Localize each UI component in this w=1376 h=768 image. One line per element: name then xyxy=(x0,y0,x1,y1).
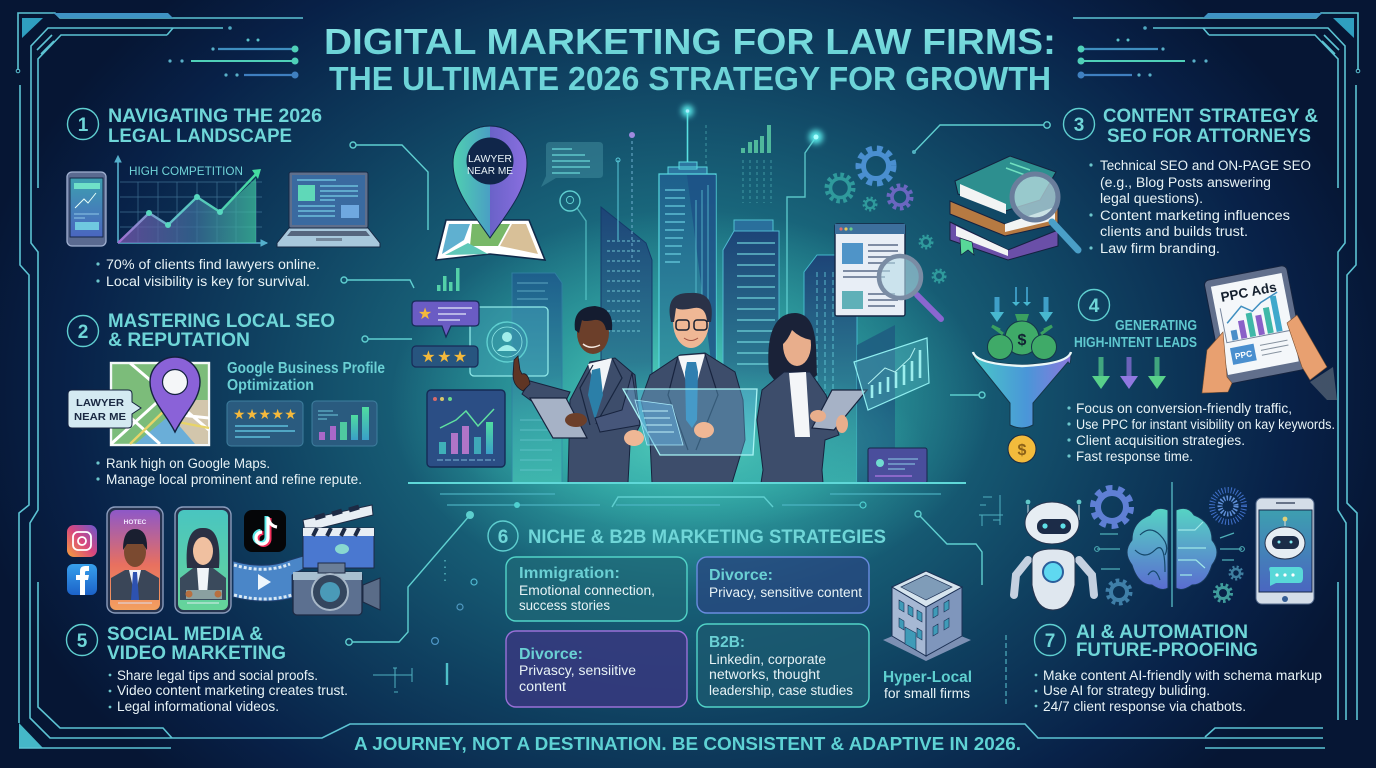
icon: map pin lawyer near me xyxy=(436,126,545,260)
bullets xyxy=(1067,401,1335,464)
number 6: 6 xyxy=(498,527,508,548)
card: divorce: Divorce: xyxy=(709,567,773,584)
heading xyxy=(1076,622,1258,661)
heading: & REPUTATION xyxy=(108,330,250,351)
review card: ★★★★★ xyxy=(233,406,297,422)
number 3: 3 xyxy=(1074,115,1084,136)
number 7: 7 xyxy=(1045,631,1055,652)
icon: video camera xyxy=(293,563,380,615)
card: immigration xyxy=(506,557,687,621)
section 1: legal landscape xyxy=(67,106,380,289)
bullets: Fast response time. xyxy=(1076,449,1193,464)
heading: FUTURE-PROOFING xyxy=(1076,640,1258,661)
bullets xyxy=(1089,158,1311,256)
heading: GENERATING xyxy=(1115,318,1197,334)
card: divorce alternate: content xyxy=(519,679,566,694)
section 7: AI automation xyxy=(1014,482,1322,714)
card: B2B: networks, thought xyxy=(709,667,820,682)
card: B2B: B2B: xyxy=(709,634,745,651)
icon: map pin lawyer near me: LAWYER xyxy=(468,154,512,165)
bullets: Use PPC for instant visibility on kay keywords. xyxy=(1076,417,1335,432)
phone with female lawyer xyxy=(175,507,231,613)
heading xyxy=(107,624,286,664)
heading xyxy=(1103,106,1318,147)
heading: SEO FOR ATTORNEYS xyxy=(1107,126,1311,147)
lawyer: left man xyxy=(513,306,640,483)
number 5: 5 xyxy=(77,631,88,652)
footer banner: A JOURNEY, NOT A DESTINATION. BE CONSISTENT & ADAPTIVE IN 2026. xyxy=(354,734,1021,754)
icon: PPC tablet with hands: PPC Ads xyxy=(1219,279,1278,305)
review card xyxy=(227,401,303,446)
icon: PPC tablet with hands xyxy=(1202,265,1337,400)
icon: facebook xyxy=(67,564,97,595)
section 4: high-intent leads xyxy=(973,265,1337,464)
icon: funnel with money bags: $ xyxy=(1018,332,1027,349)
card: immigration: Emotional connection, xyxy=(519,583,655,598)
section 3: content strategy xyxy=(950,106,1318,260)
bullets: Manage local prominent and refine repute. xyxy=(106,472,362,487)
callout: lawyer near me: NEAR ME xyxy=(74,411,126,423)
card: B2B: leadership, case studies xyxy=(709,683,853,698)
card: B2B xyxy=(697,624,869,707)
bullets xyxy=(109,668,348,714)
card: immigration: success stories xyxy=(519,598,610,613)
label: hyper-local: Hyper-Local xyxy=(883,669,972,686)
card: immigration: Immigration: xyxy=(519,565,620,582)
number 6 xyxy=(488,521,518,551)
heading: AI & AUTOMATION xyxy=(1076,622,1248,643)
bullets: Video content marketing creates trust. xyxy=(117,683,348,698)
icon: tiktok xyxy=(244,510,286,552)
heading: LEGAL LANDSCAPE xyxy=(108,126,292,147)
circuit connector lines xyxy=(341,122,1050,707)
icons: gears xyxy=(827,149,945,282)
number 2: 2 xyxy=(78,322,88,343)
icon: robot xyxy=(1014,500,1094,610)
bullets: 70% of clients find lawyers online. xyxy=(106,257,320,272)
info card xyxy=(868,448,927,483)
holographic chart xyxy=(854,338,929,410)
bullets: Use AI for strategy buliding. xyxy=(1043,683,1210,698)
icon: phone chatbot xyxy=(1256,498,1314,604)
frame: top-right corner xyxy=(1073,13,1360,748)
heading xyxy=(108,311,335,351)
section 5: social media and video xyxy=(66,505,380,714)
skyline xyxy=(512,105,895,483)
title: THE ULTIMATE 2026 STRATEGY FOR GROWTH xyxy=(329,60,1051,97)
subheading: Optimization xyxy=(227,377,314,394)
card: divorce alternate xyxy=(506,631,687,707)
bullets: Make content AI-friendly with schema markup xyxy=(1043,668,1322,683)
section 2: local SEO xyxy=(68,311,385,487)
card: divorce alternate: Divorce: xyxy=(519,646,583,663)
label: hyper-local: for small firms xyxy=(884,686,970,701)
heading: MASTERING LOCAL SEO xyxy=(108,311,335,332)
bullets xyxy=(1035,668,1322,714)
card: divorce xyxy=(697,557,869,613)
line chart: high competition: HIGH COMPETITION xyxy=(129,164,243,178)
bullets: Client acquisition strategies. xyxy=(1076,433,1245,448)
mini bar icon xyxy=(437,268,460,291)
callout: lawyer near me xyxy=(68,390,141,428)
icon: instagram xyxy=(67,525,97,557)
floor glow xyxy=(455,360,925,530)
bullets: Local visibility is key for survival. xyxy=(106,274,310,289)
central scene: city and lawyers xyxy=(390,105,990,600)
icon: document with magnifier xyxy=(835,224,941,319)
subheading: Google Business Profile xyxy=(227,360,385,377)
label: hyper-local xyxy=(883,669,972,701)
icon: funnel with money bags: $ xyxy=(1018,442,1027,459)
bullets xyxy=(96,257,320,289)
number 5 xyxy=(66,624,98,656)
review bubble: ★ xyxy=(418,306,432,323)
heading: SOCIAL MEDIA & xyxy=(107,624,263,645)
bullets xyxy=(96,456,362,487)
heading: HIGH-INTENT LEADS xyxy=(1074,335,1197,351)
review bubble xyxy=(412,301,479,337)
bullets: Share legal tips and social proofs. xyxy=(117,668,318,683)
number 1: 1 xyxy=(78,115,89,136)
title: DIGITAL MARKETING FOR LAW FIRMS: xyxy=(324,21,1056,62)
phone with male lawyer: HOTEC xyxy=(124,519,147,526)
title xyxy=(324,21,1056,97)
bar card xyxy=(312,401,377,446)
number 2 xyxy=(68,316,98,346)
glow behind the lawyers xyxy=(390,210,990,600)
number 7 xyxy=(1034,624,1066,656)
card: divorce: Privacy, sensitive content xyxy=(709,585,862,600)
card: B2B: Linkedin, corporate xyxy=(709,652,826,667)
icon: books with magnifier xyxy=(950,156,1078,260)
icon: map with pin xyxy=(111,357,209,445)
heading: NAVIGATING THE 2026 xyxy=(108,106,322,127)
base line xyxy=(408,483,966,508)
arrows xyxy=(1092,357,1166,389)
top bars icon xyxy=(741,125,771,153)
bullets: clients and builds trust. xyxy=(1100,224,1248,239)
lawyer: centre man xyxy=(623,293,757,483)
bullets: Technical SEO and ON-PAGE SEO xyxy=(1100,158,1311,173)
section 6: niche and B2B xyxy=(488,521,972,707)
icon: building xyxy=(883,571,971,661)
speech bubble xyxy=(541,142,603,300)
icon: gears and starburst xyxy=(1094,489,1244,603)
line chart: high competition xyxy=(115,156,267,246)
bullets: Focus on conversion-friendly traffic, xyxy=(1076,401,1292,416)
icon: funnel with money bags xyxy=(973,287,1071,463)
heading: CONTENT STRATEGY & xyxy=(1103,106,1318,127)
phone with male lawyer xyxy=(107,507,163,613)
bullets: Content marketing influences xyxy=(1100,208,1290,223)
three star rating: ★★★ xyxy=(421,349,469,366)
icon: phone xyxy=(67,172,106,246)
three star rating xyxy=(412,346,478,367)
icon: PPC tablet with hands: PPC xyxy=(1234,348,1253,361)
icon: film strip xyxy=(233,547,334,601)
holographic profile panel xyxy=(470,307,548,376)
bullets: Legal informational videos. xyxy=(117,699,279,714)
number 4 xyxy=(1078,290,1110,320)
heading: VIDEO MARKETING xyxy=(107,643,286,664)
bullets: legal questions). xyxy=(1100,191,1203,206)
number 1 xyxy=(68,108,98,140)
bullets: Law firm branding. xyxy=(1100,241,1220,256)
bullets: Rank high on Google Maps. xyxy=(106,456,270,471)
heading: NICHE & B2B MARKETING STRATEGIES xyxy=(528,527,886,548)
number 3 xyxy=(1064,108,1094,140)
icon: map pin lawyer near me: NEAR ME xyxy=(467,166,513,177)
analytics panel xyxy=(427,390,505,467)
callout: lawyer near me: LAWYER xyxy=(76,397,124,409)
number 4: 4 xyxy=(1089,296,1100,317)
bullets: 24/7 client response via chatbots. xyxy=(1043,699,1246,714)
subheading xyxy=(227,360,385,394)
icon: clapperboard xyxy=(303,505,374,568)
heading xyxy=(108,106,322,147)
icon: laptop xyxy=(277,172,380,247)
heading xyxy=(1074,318,1197,351)
card: divorce alternate: Privascy, sensiitive xyxy=(519,663,636,678)
lawyer: right woman xyxy=(757,313,867,483)
icon: brain xyxy=(1095,482,1244,607)
bullets: (e.g., Blog Posts answering xyxy=(1100,175,1271,190)
